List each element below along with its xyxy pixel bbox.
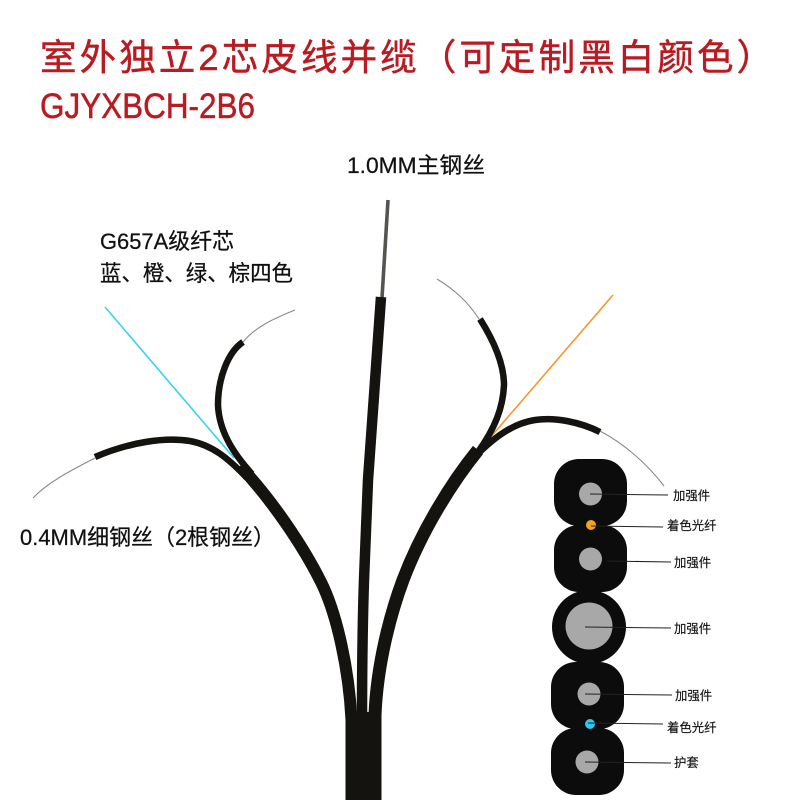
left cable upper branch: [218, 342, 252, 474]
callout labels: 加强件: [675, 689, 712, 703]
blue fibre: [105, 307, 234, 458]
lower wire unit 2: [551, 728, 624, 795]
callout labels: 护套: [674, 755, 699, 770]
orange fibre dot: [586, 520, 596, 530]
cross-section diagram: [551, 459, 717, 795]
right cable upper branch: [478, 319, 504, 452]
left thin wires: [33, 310, 295, 498]
label: main steel wire: 1.0MM主钢丝: [347, 153, 485, 178]
left cable lower branch: [95, 440, 247, 478]
callout labels: 加强件: [674, 622, 711, 636]
callout labels: 加强件: [673, 489, 710, 503]
leader lines: [585, 494, 672, 763]
callout labels: 着色光纤: [667, 518, 717, 533]
right cable trunk: [375, 450, 478, 800]
centre steel wire: [382, 200, 388, 298]
central strength member: [552, 590, 626, 664]
callout labels: 加强件: [674, 556, 711, 570]
cable photo: [33, 200, 664, 800]
title: 室外独立2芯皮线并缆（可定制黑白颜色）: [40, 37, 776, 78]
right thin wires: [437, 279, 664, 486]
lower wire unit 1: [551, 662, 624, 729]
blue fibre dot: [585, 719, 595, 729]
orange fibre: [489, 295, 613, 439]
model number: GJYXBCH-2B6: [40, 87, 255, 126]
upper wire unit 1: [554, 459, 627, 526]
callout labels: 着色光纤: [667, 720, 717, 735]
label: G657A fibre core: G657A级纤芯: [100, 229, 234, 254]
centre cable: [362, 297, 381, 800]
label: thin steel wires: 0.4MM细钢丝（2根钢丝）: [20, 525, 275, 550]
upper wire unit 2: [554, 525, 627, 592]
right cable lower branch: [470, 419, 600, 462]
label: four fibre colours: 蓝、橙、绿、棕四色: [100, 261, 293, 286]
callout labels: [667, 489, 717, 770]
merged cable base: [346, 712, 381, 800]
left cable trunk: [240, 466, 352, 800]
